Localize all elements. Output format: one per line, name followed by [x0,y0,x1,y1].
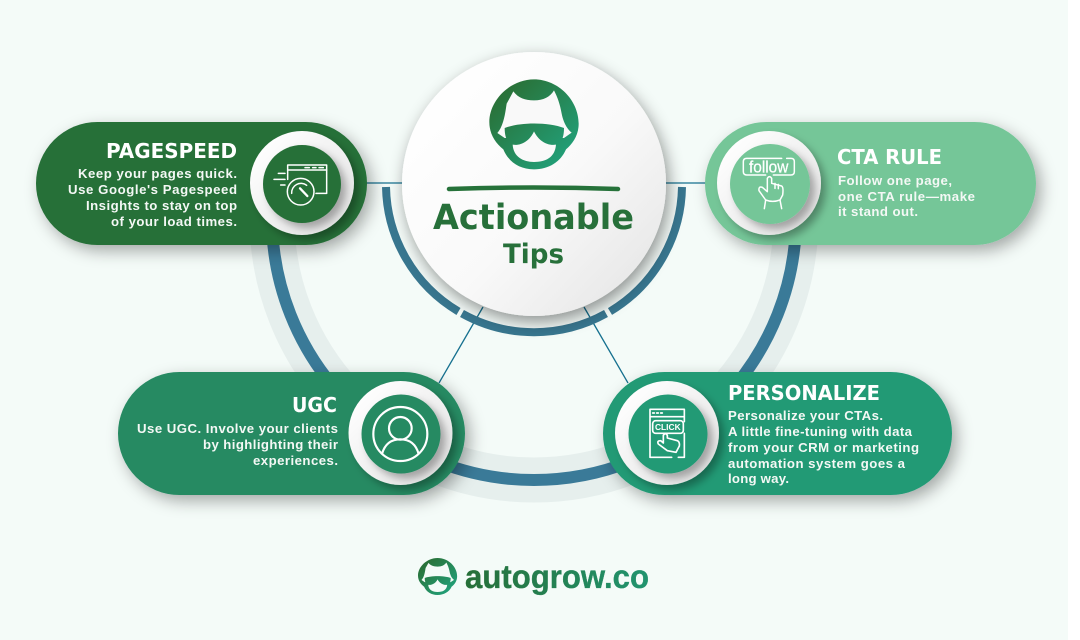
body text [68,166,237,229]
body text: experiences. [253,453,338,468]
body text: Insights to stay on top [86,198,237,213]
body text: Follow one page, [838,173,952,188]
panel: cta rule [705,122,1036,245]
body text: Keep your pages quick. [78,166,237,181]
body text: from your CRM or marketing [728,440,919,455]
icon: follow button: follow [749,158,789,177]
divider rule [449,188,618,189]
heading: CTA RULE [837,145,942,169]
heading: UGC [292,393,337,417]
body text: by highlighting their [203,437,338,452]
outer ring [251,245,817,502]
subtitle: Tips [503,239,564,270]
inner arc [386,187,682,332]
heading: PAGESPEED [106,139,237,163]
body text: Use Google's Pagespeed [68,182,237,197]
heading: PERSONALIZE [728,381,880,405]
icon: user avatar [373,407,427,461]
body text [838,173,975,219]
body text: Use UGC. Involve your clients [137,421,338,436]
body text: long way. [728,471,789,486]
body text [137,421,338,468]
body text: of your load times. [111,214,237,229]
panel: pagespeed [36,122,367,245]
icon: brand mascot [418,558,457,595]
icon: click window: CLICK [655,423,681,432]
icon: mascot logo [489,79,579,169]
panel: ugc [118,372,465,495]
body text [728,408,919,486]
brand footer [418,558,649,595]
icon: click window [650,409,684,457]
title: Actionable [433,198,634,238]
brand name: autogrow.co [465,558,649,595]
body text: one CTA rule—make [838,189,975,204]
icon: follow button [743,158,794,209]
panel: personalize [603,372,952,495]
central circle [402,52,666,316]
connector lines [360,183,712,383]
body text: A little fine-tuning with data [728,424,913,439]
body text: Personalize your CTAs. [728,408,883,423]
body text: it stand out. [838,204,918,219]
body text: automation system goes a [728,456,906,471]
icon: browser speedometer [274,165,327,205]
